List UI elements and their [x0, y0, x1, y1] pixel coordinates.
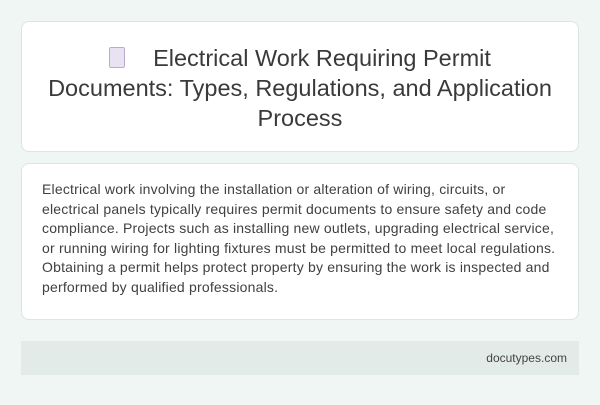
- description text: compliance. Projects such as installing new outlets, upgrading electrical service,: [42, 220, 554, 236]
- description text: Electrical work involving the installation or alteration of wiring, circuits, or: [42, 181, 505, 197]
- footer: docutypes.com: [486, 351, 567, 365]
- description text: performed by qualified professionals.: [42, 279, 278, 295]
- title: Electrical Work Requiring Permit: [153, 45, 491, 71]
- title: Documents: Types, Regulations, and Application: [48, 75, 552, 101]
- description text: or running wiring for lighting fixtures must be permitted to meet local regulations.: [42, 240, 555, 256]
- description text: electrical panels typically requires permit documents to ensure safety and code: [42, 201, 546, 217]
- description text: [42, 181, 555, 295]
- title panel: [21, 21, 579, 152]
- icon: document: [109, 47, 125, 68]
- description text: Obtaining a permit helps protect property by ensuring the work is inspected and: [42, 259, 550, 275]
- footer: [21, 341, 579, 375]
- title: [48, 45, 552, 131]
- description panel: [21, 163, 579, 320]
- title: Process: [258, 105, 342, 131]
